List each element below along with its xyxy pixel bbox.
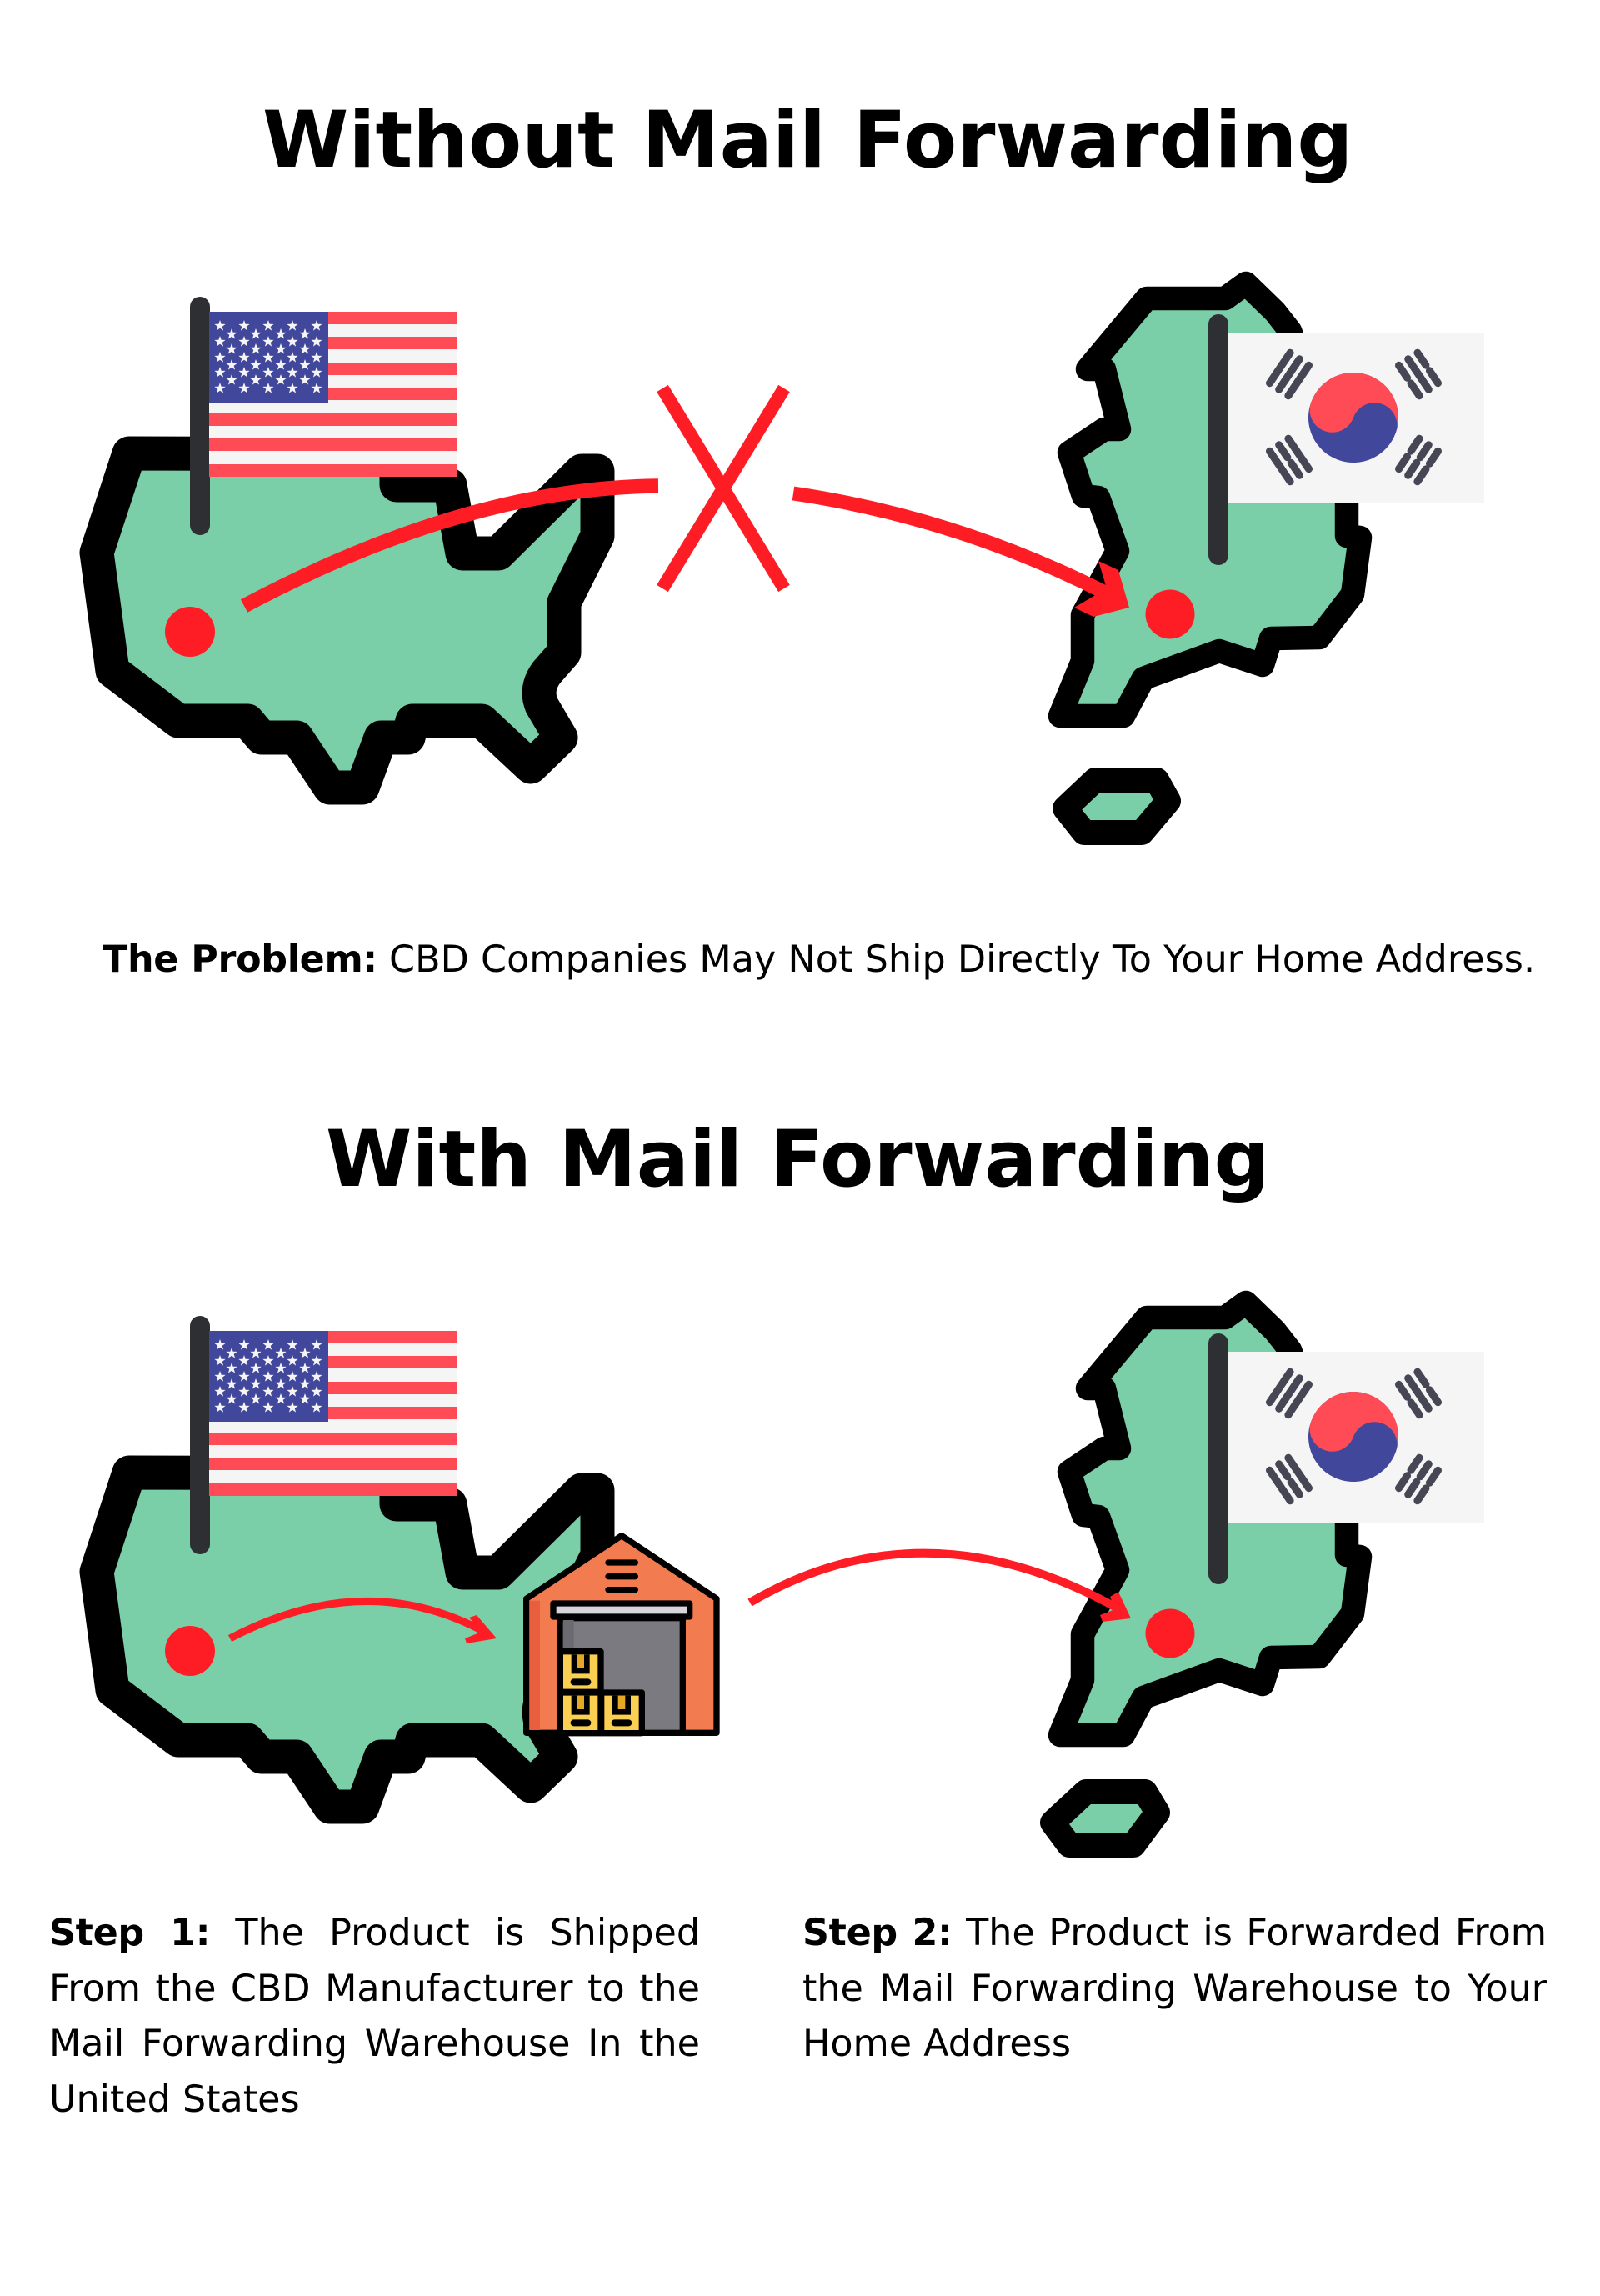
map: South Korea with flag (with forwarding) <box>1060 1303 1484 1735</box>
text: step 1: From the CBD Manufacturer to the <box>49 1967 700 2010</box>
title: with mail forwarding: With Mail Forwarding <box>326 1114 1270 1205</box>
text: step 2: Home Address <box>802 2023 1071 2065</box>
text: step 1 <box>49 1912 700 2120</box>
arrow: from blocked X to Korea <box>793 493 1129 617</box>
arrow: shipment from US blocked <box>244 486 658 606</box>
icon: red X <box>662 388 784 588</box>
icon: Jeju island (with forwarding) <box>1052 1792 1158 1845</box>
text: the problem: The Problem: CBD Companies May Not Ship Directly To Your Home Address. <box>102 938 1535 981</box>
title: without mail forwarding: Without Mail Forwarding <box>262 95 1352 186</box>
arrow: manufacturer to warehouse <box>230 1601 497 1643</box>
map: United States with flag (with forwarding) <box>97 1326 598 1807</box>
text: step 2 <box>802 1912 1547 2065</box>
text: step 1: United States <box>49 2078 300 2120</box>
text: step 2: Step 2: The Product is Forwarded From <box>802 1912 1547 1954</box>
icon: warehouse <box>527 1536 717 1733</box>
text: step 2: the Mail Forwarding Warehouse to Your <box>802 1967 1547 2010</box>
text: step 1: Mail Forwarding Warehouse In the <box>49 2023 700 2065</box>
map: South Korea with flag (without forwarding) <box>1060 283 1484 716</box>
text: step 1: Step 1: The Product is Shipped <box>49 1912 700 1954</box>
map: United States with flag (without forwarding) <box>97 307 598 788</box>
arrow: warehouse to Korea <box>750 1553 1131 1622</box>
icon: Jeju island <box>1065 780 1168 833</box>
